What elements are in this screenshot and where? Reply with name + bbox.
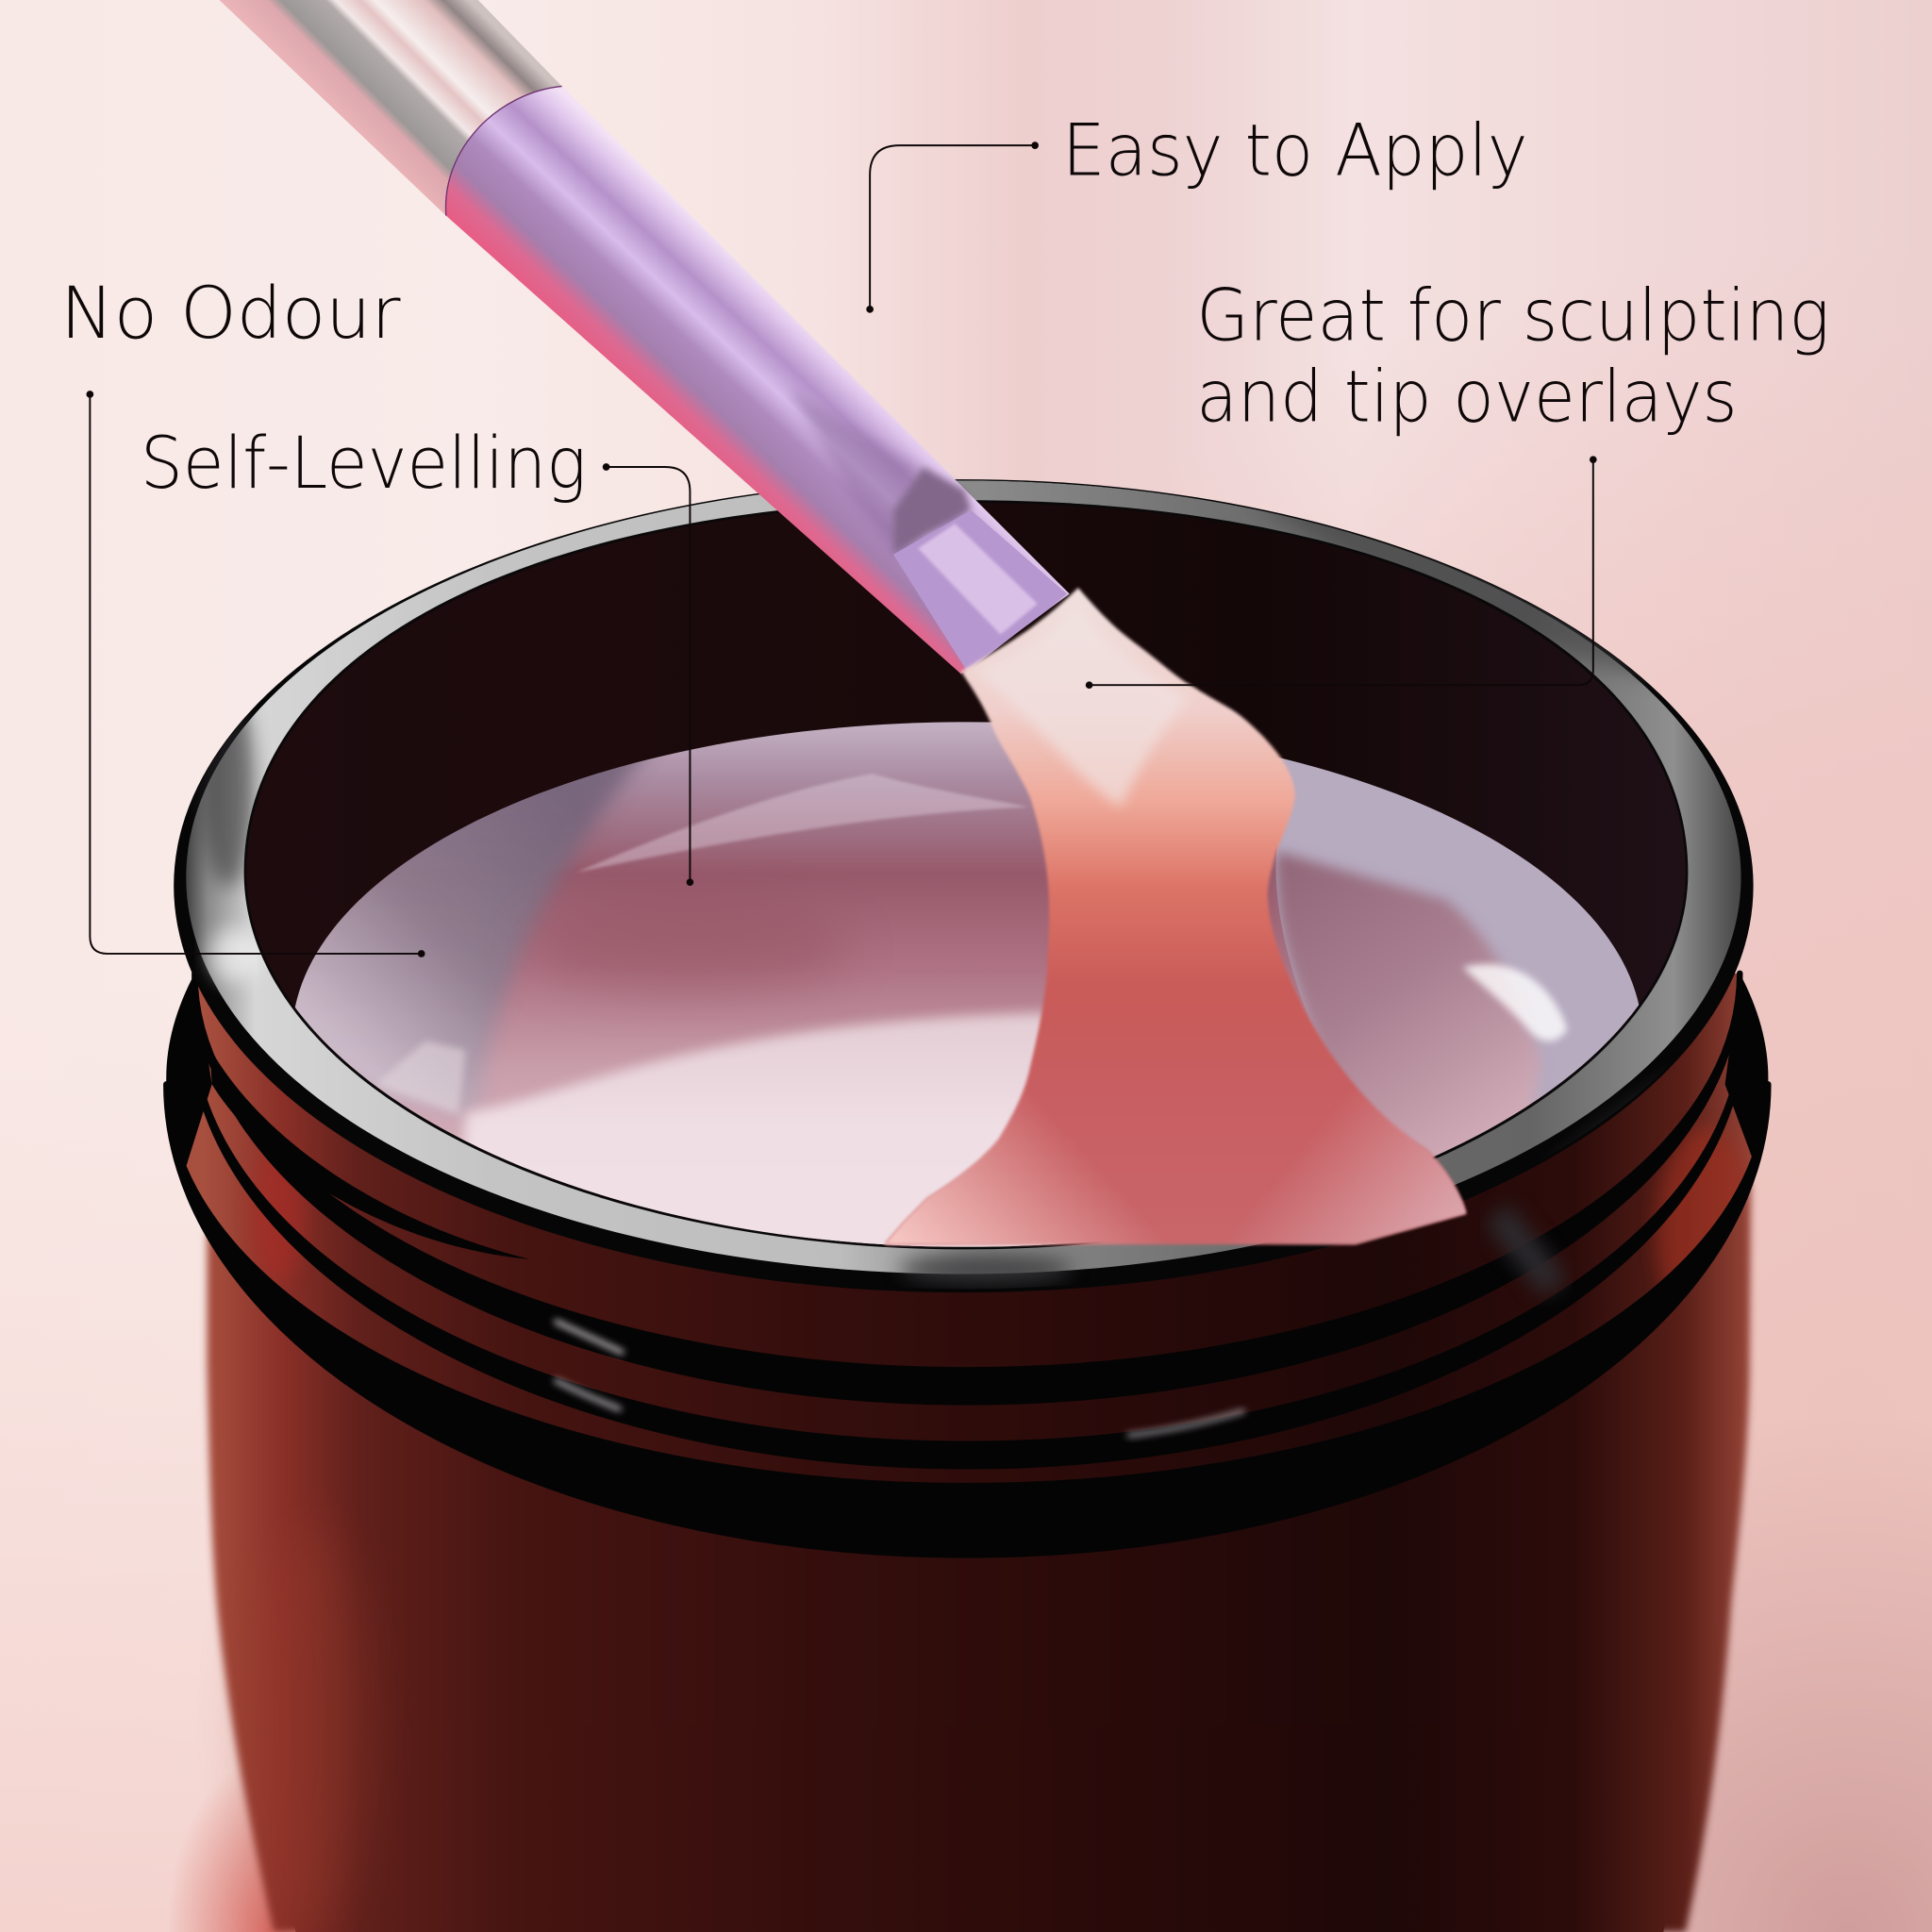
lower thread highlight	[555, 1380, 621, 1409]
gel reddish centre	[530, 905, 850, 993]
strand lower-right fade	[1171, 1059, 1466, 1244]
short thread end	[209, 1047, 530, 1259]
leader line: Great for sculpting	[1087, 457, 1596, 688]
dark thread reflection	[1497, 1214, 1555, 1288]
brush handle silver	[219, 0, 562, 216]
ferrule notch	[893, 467, 971, 555]
jar body	[166, 974, 1768, 1932]
gel right inner	[1275, 847, 1540, 1157]
upper thread highlight	[555, 1321, 624, 1353]
ferrule joint line	[446, 86, 562, 216]
gel left edge	[294, 758, 655, 1111]
gel pool highlight	[458, 1006, 1069, 1247]
label: Easy to Apply: Easy to Apply	[1062, 108, 1528, 192]
leader line: Self-Levelling	[604, 464, 692, 885]
strand lower-left fade	[885, 1067, 1232, 1244]
leader line: Easy to Apply	[867, 142, 1038, 312]
right flange wedge	[1725, 974, 1768, 1164]
ferrule shadow streak	[789, 388, 918, 548]
label: No Odour: No Odour	[60, 272, 401, 355]
ferrule flat tip highlight	[918, 524, 1038, 635]
jar neck threads	[166, 974, 1768, 1555]
leader line: No Odour	[87, 391, 425, 957]
gel right surface	[1275, 758, 1640, 1157]
gel strand on brush	[885, 588, 1466, 1244]
right thread highlight	[1127, 1411, 1244, 1436]
jar rim	[174, 455, 1754, 1292]
left flange wedge	[166, 974, 212, 1171]
strand highlight	[974, 604, 1189, 808]
gel left reflection	[375, 1041, 466, 1115]
label: Self-Levelling: Self-Levelling	[141, 422, 587, 505]
label: Great for sculpting and tip overlays: Great for sculpting	[1196, 274, 1830, 357]
label: Great for sculpting and tip overlays	[1196, 274, 1830, 439]
gel right reflection	[1462, 964, 1567, 1041]
gel sheen	[576, 774, 1029, 873]
gel surface	[294, 722, 1640, 1247]
label: Great for sculpting and tip overlays: and tip overlays	[1196, 356, 1738, 439]
ferrule flat tip	[893, 510, 1067, 672]
jar interior	[246, 503, 1686, 1247]
brush ferrule	[446, 86, 1070, 674]
